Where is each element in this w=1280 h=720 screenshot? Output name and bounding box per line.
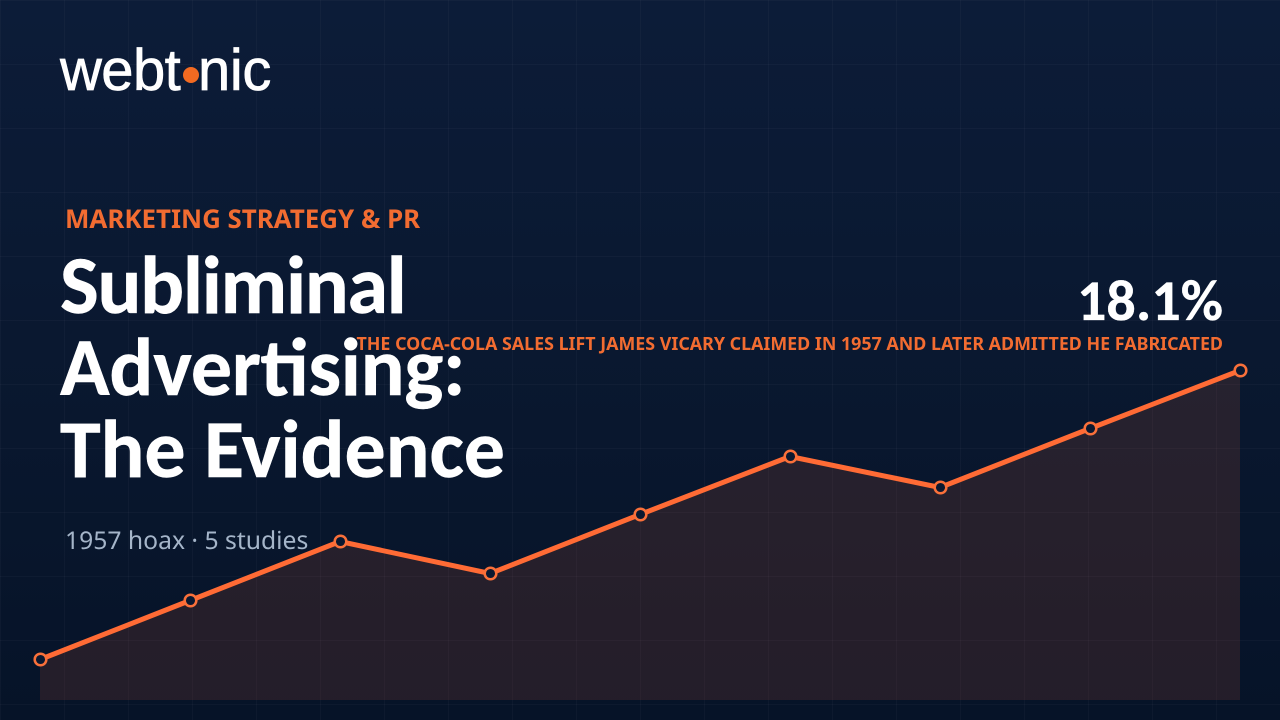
title: Subliminal [60,236,406,336]
chart line [40,370,1240,660]
title: The Evidence [60,400,505,500]
logo: webtonic: nic [198,38,271,103]
title: Advertising: [60,318,465,418]
logo orange dot [183,67,199,83]
big statistic: 18.1% [1077,265,1223,336]
statistic caption: THE COCA-COLA SALES LIFT JAMES VICARY CLAIMED IN 1957 AND LATER ADMITTED HE FABRICATED [356,332,1223,356]
eyebrow label: MARKETING STRATEGY & PR [65,200,420,236]
logo: webtonic [60,38,271,103]
subtitle: 1957 hoax · 5 studies [65,524,308,557]
title [60,236,505,500]
logo: webtonic: webt [60,38,180,103]
chart area fill [40,370,1240,700]
chart data points [35,365,1246,665]
